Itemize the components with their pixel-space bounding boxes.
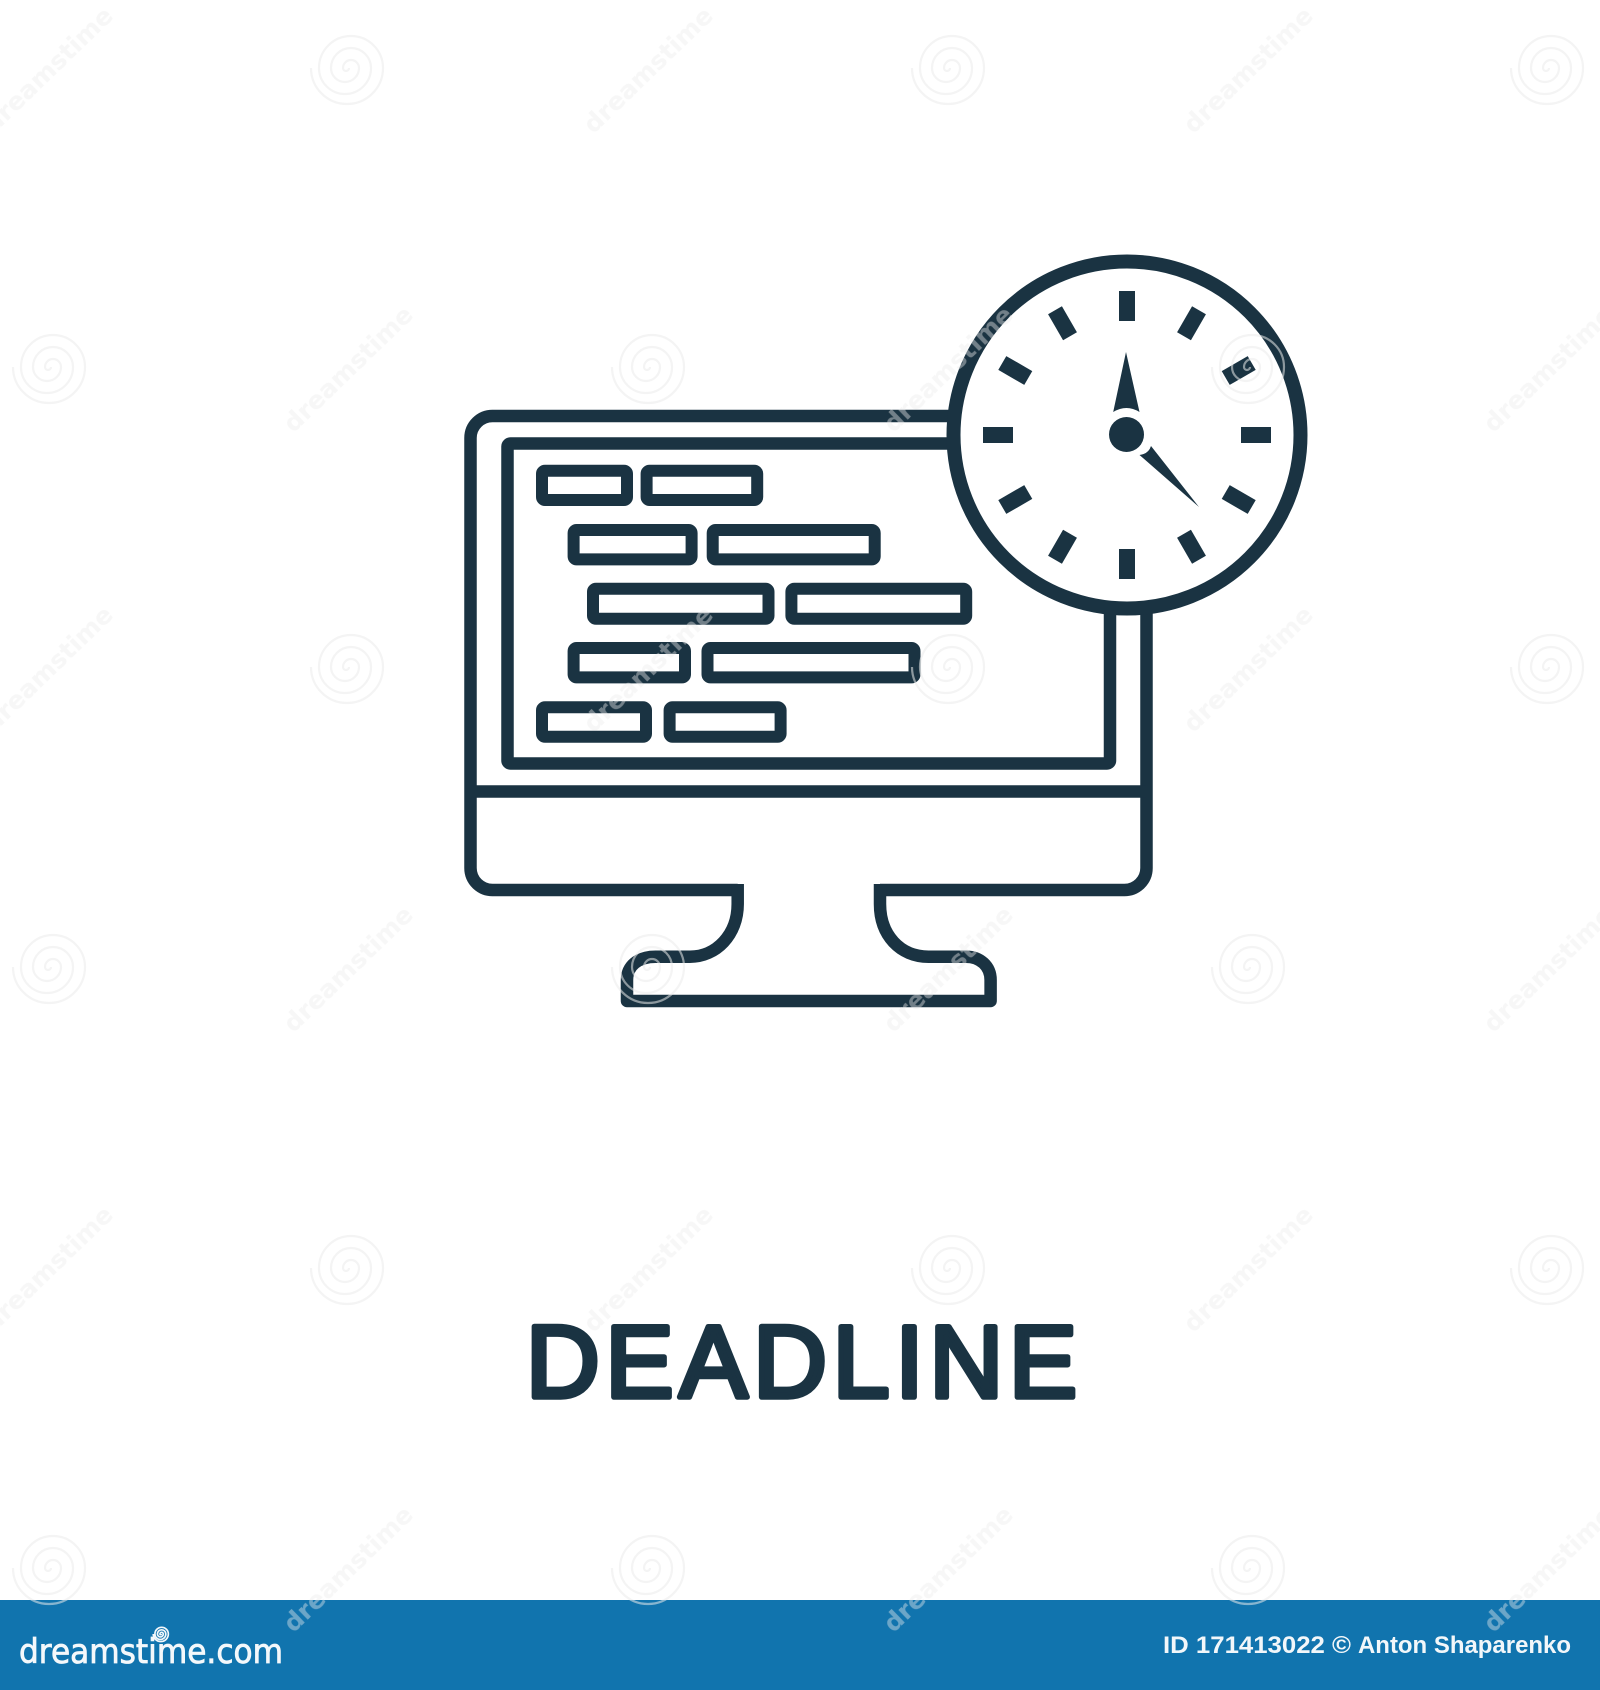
- watermark text: dreamstime: [877, 300, 1019, 438]
- watermark text: dreamstime: [577, 600, 719, 738]
- clock face: [954, 262, 1300, 608]
- watermark text: dreamstime: [877, 900, 1019, 1038]
- watermark text: dreamstime: [277, 1500, 419, 1638]
- footer credit: ID 171413022 ©: [1163, 1632, 1351, 1659]
- footer credit: [1163, 1632, 1571, 1659]
- watermark text: dreamstime: [277, 300, 419, 438]
- clock: [954, 262, 1300, 608]
- footer credit: Anton Shaparenko: [1358, 1632, 1571, 1659]
- footer logo: dreamstime.com: [19, 1632, 283, 1672]
- watermark text: dreamstime: [1177, 1200, 1319, 1338]
- footer bar: [0, 1600, 1600, 1690]
- watermark text: dreamstime: [877, 1500, 1019, 1638]
- code blocks: [542, 471, 966, 737]
- watermark text: dreamstime: [1177, 600, 1319, 738]
- title: DEADLINE: [526, 1305, 1077, 1419]
- monitor screen: [508, 444, 1110, 764]
- clock hands: [1109, 352, 1199, 507]
- clock ticks: [983, 291, 1271, 579]
- watermark text: dreamstime: [577, 1, 719, 139]
- watermark text: dreamstime: [577, 1200, 719, 1338]
- icon: monitor with deadline clock: [470, 262, 1300, 1001]
- watermark text: dreamstime: [277, 900, 419, 1038]
- monitor body: [470, 416, 1146, 890]
- watermark text: dreamstime: [1177, 1, 1319, 139]
- monitor stand: [627, 884, 991, 1001]
